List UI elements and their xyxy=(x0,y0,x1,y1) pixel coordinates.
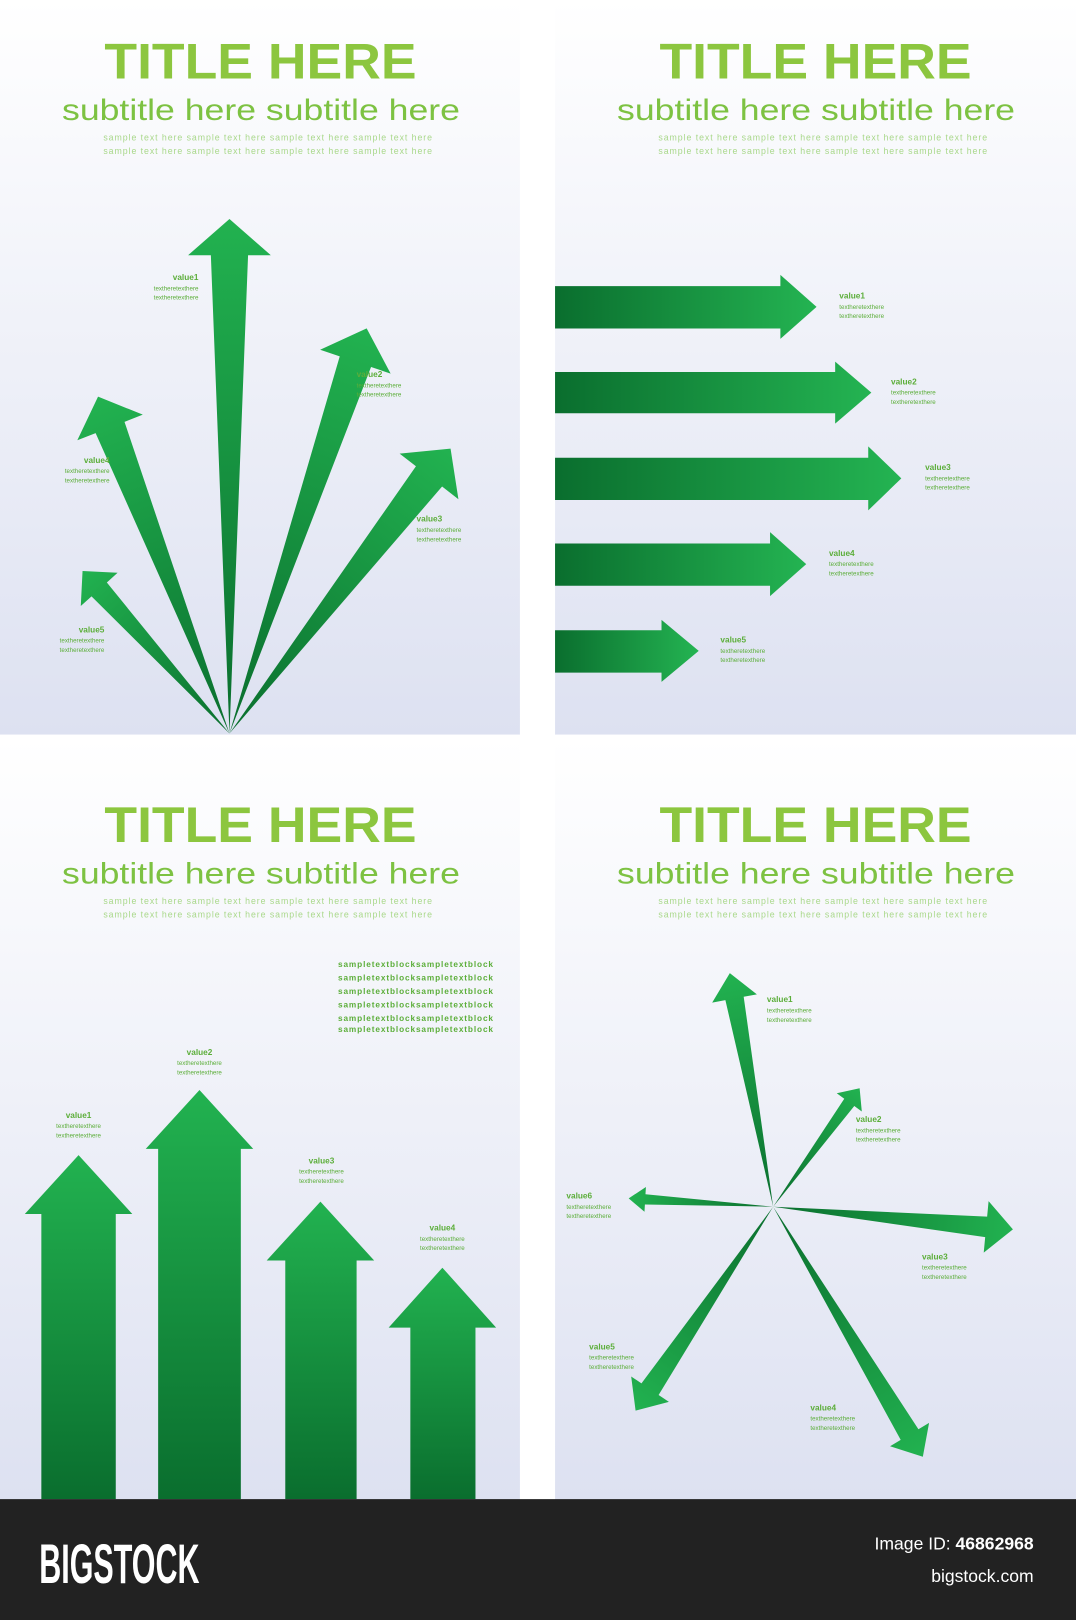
labels xyxy=(154,273,199,302)
panel: top-right horizontal arrows: textheretexthere xyxy=(891,399,936,406)
panel: bottom-left up arrows: value3 xyxy=(309,1156,335,1165)
panel: bottom-left up arrows: value4 xyxy=(430,1223,456,1232)
panel: bottom-left up arrows: textheretexthere xyxy=(299,1169,344,1176)
text block: sampletextblocksampletextblock xyxy=(338,1000,493,1009)
panel: top-right horizontal arrows: value1 xyxy=(839,292,865,301)
panel: bottom-right star arrows: value2 xyxy=(856,1115,882,1124)
labels: value1 xyxy=(173,273,199,282)
labels: textheretexthere xyxy=(154,285,199,292)
panel: bottom-right star arrows: subtitle here subtitle here xyxy=(617,857,1015,890)
panel: top-left fan arrows: value3 xyxy=(417,515,443,524)
panel: top-right horizontal arrows xyxy=(555,0,1076,735)
sample text: sample text here sample text here sample text here sample text here xyxy=(103,146,432,156)
panel: bottom-right star arrows: textheretexthere xyxy=(589,1364,634,1371)
panel: top-left fan arrows: textheretexthere xyxy=(60,647,105,654)
panel: top-left fan arrows: textheretexthere xyxy=(60,638,105,645)
panel: top-right horizontal arrows: value5 xyxy=(720,636,747,645)
panel: bottom-right star arrows: textheretexthere xyxy=(767,1008,812,1014)
panel: top-right horizontal arrows: textheretexthere xyxy=(925,485,970,492)
panel: bottom-left up arrows: TITLE HERE xyxy=(104,797,417,853)
panel: bottom-left up arrows: textheretexthere xyxy=(299,1178,344,1185)
panel: bottom-right star arrows: textheretexthere xyxy=(856,1127,901,1134)
panel: top-right horizontal arrows: value2 xyxy=(891,377,917,386)
image id: Image ID: 46862968 xyxy=(875,1534,1034,1554)
panel: bottom-left up arrows: textheretexthere xyxy=(177,1060,222,1067)
panel: top-right horizontal arrows: textheretexthere xyxy=(829,561,874,568)
arrow fan xyxy=(64,219,480,756)
panel: top-right horizontal arrows: textheretexthere xyxy=(839,313,885,320)
text block: sampletextblocksampletextblock xyxy=(338,973,493,982)
text block: sampletextblocksampletextblock xyxy=(338,960,493,969)
panel: bottom-left up arrows: textheretexthere xyxy=(420,1245,465,1252)
panel: bottom-right star arrows: textheretexthere xyxy=(810,1425,856,1432)
panel: bottom-left up arrows: textheretexthere xyxy=(56,1133,101,1140)
panel: bottom-left up arrows: subtitle here subtitle here xyxy=(62,857,460,890)
panel: bottom-left up arrows: value1 xyxy=(66,1111,92,1120)
panel: bottom-right star arrows: TITLE HERE xyxy=(659,797,972,853)
panel: top-left fan arrows: value4 xyxy=(84,456,110,465)
panel: bottom-right star arrows: value4 xyxy=(810,1403,836,1412)
panel: bottom-right star arrows: textheretexthere xyxy=(589,1355,634,1362)
panel: bottom-left up arrows: textheretexthere xyxy=(56,1123,101,1130)
panel: top-right horizontal arrows: textheretexthere xyxy=(891,390,936,397)
panel: top-right horizontal arrows: value3 xyxy=(925,463,951,472)
footer logo: BIGSTOCK xyxy=(39,1532,199,1595)
panel: bottom-left up arrows: textheretexthere xyxy=(177,1069,222,1076)
panel: top-left fan arrows: textheretexthere xyxy=(65,468,110,475)
panel: top-left fan arrows: textheretexthere xyxy=(417,527,462,534)
panel: top-right horizontal arrows: textheretexthere xyxy=(829,570,874,577)
panel: bottom-left up arrows: sample text here sample text here sample text here sample text here xyxy=(103,909,432,919)
labels: textheretexthere xyxy=(154,295,199,302)
footer bar xyxy=(0,1499,1076,1620)
panel: bottom-left up arrows xyxy=(0,739,520,1500)
title: TITLE HERE xyxy=(104,34,417,90)
panel: bottom-right star arrows: textheretexthere xyxy=(810,1416,856,1423)
panel: top-left fan arrows xyxy=(0,0,520,756)
panel: bottom-right star arrows: textheretexthere xyxy=(856,1137,901,1144)
panel: top-left fan arrows: value2 xyxy=(357,370,383,379)
panel: bottom-right star arrows: value5 xyxy=(589,1342,615,1351)
panel: top-right horizontal arrows: sample text here sample text here sample text here sample text here xyxy=(658,133,987,143)
panel: bottom-right star arrows: sample text here sample text here sample text here sample text here xyxy=(658,896,987,906)
panel: top-right horizontal arrows: textheretexthere xyxy=(839,304,885,311)
panel: top-right horizontal arrows: TITLE HERE xyxy=(659,34,972,90)
panel: bottom-right star arrows: value6 xyxy=(566,1191,593,1200)
panel: top-right horizontal arrows: textheretexthere xyxy=(720,657,766,664)
sample text xyxy=(103,133,432,156)
panel: bottom-right star arrows: textheretexthere xyxy=(767,1017,812,1024)
panel: top-left fan arrows: textheretexthere xyxy=(417,536,462,543)
panel: top-left fan arrows: value5 xyxy=(79,625,105,634)
panel: top-right horizontal arrows: textheretexthere xyxy=(720,648,766,655)
panel: bottom-left up arrows: value2 xyxy=(187,1048,213,1057)
panel: top-right horizontal arrows: textheretexthere xyxy=(925,475,970,482)
text block: sampletextblocksampletextblock xyxy=(338,1025,493,1034)
panel: bottom-right star arrows: textheretexthere xyxy=(566,1204,612,1211)
panel: bottom-right star arrows: textheretexthere xyxy=(566,1213,612,1220)
panel: bottom-left up arrows: textheretexthere xyxy=(420,1236,465,1243)
panel: top-left fan arrows: textheretexthere xyxy=(357,382,402,389)
panel: bottom-right star arrows: textheretexthere xyxy=(922,1274,967,1281)
panel: bottom-right star arrows: textheretexthere xyxy=(922,1265,967,1272)
site: bigstock.com xyxy=(931,1566,1034,1586)
panel: top-right horizontal arrows: subtitle here subtitle here xyxy=(617,94,1015,127)
panel: top-left fan arrows: textheretexthere xyxy=(65,477,110,484)
subtitle: subtitle here subtitle here xyxy=(62,94,460,127)
panel: top-right horizontal arrows: sample text here sample text here sample text here sample text here xyxy=(658,146,987,156)
text block: sampletextblocksampletextblock xyxy=(338,987,493,996)
panel: bottom-left up arrows: sample text here sample text here sample text here sample text here xyxy=(103,896,432,906)
panel: bottom-right star arrows: sample text here sample text here sample text here sample text here xyxy=(658,909,987,919)
panel: bottom-right star arrows: value3 xyxy=(922,1252,948,1261)
panel: bottom-right star arrows xyxy=(555,739,1076,1500)
text block xyxy=(338,960,493,1034)
sample text: sample text here sample text here sample text here sample text here xyxy=(103,133,432,143)
panel: top-left fan arrows: textheretexthere xyxy=(357,392,402,399)
panel: bottom-right star arrows: value1 xyxy=(767,995,793,1004)
text block: sampletextblocksampletextblock xyxy=(338,1014,493,1023)
panel: top-right horizontal arrows: value4 xyxy=(829,549,855,558)
